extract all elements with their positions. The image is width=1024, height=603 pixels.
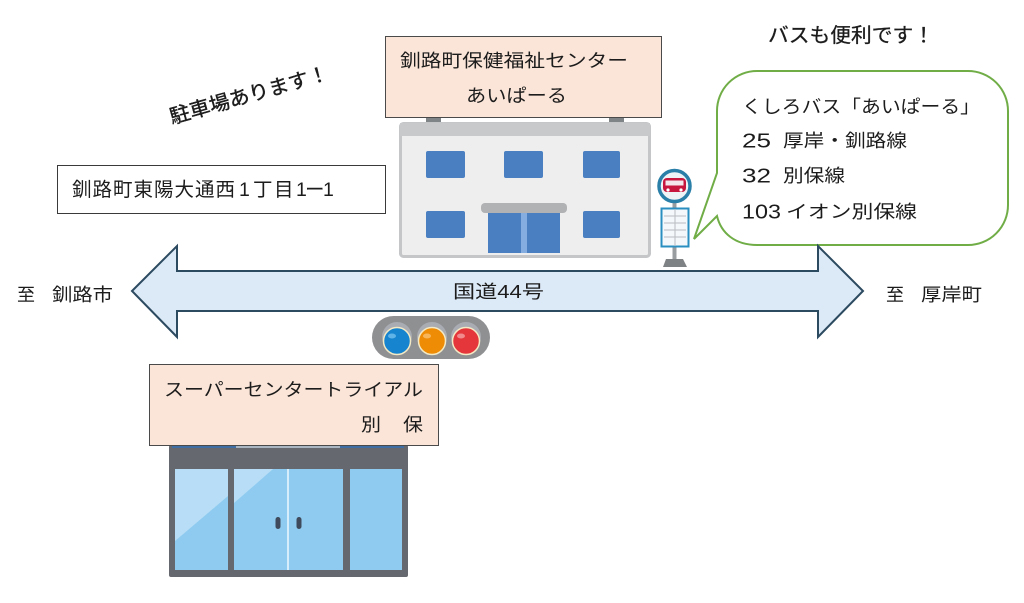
callout: bus routes: 25 <box>742 130 771 152</box>
icon: supermarket storefront <box>169 445 408 577</box>
sign: supermarket <box>150 364 438 446</box>
label: to Kushiro city: 至 <box>17 285 35 305</box>
callout: bus routes: 厚岸・釧路線 <box>783 131 907 151</box>
sign: health welfare center: あいぱーる <box>466 86 567 106</box>
address box: 釧路町東陽大通西1丁目1ー1 <box>72 179 334 201</box>
callout: bus routes: 103 <box>742 202 781 224</box>
sign: supermarket: 別 <box>361 415 381 435</box>
text: parking available: 駐車場あります！ <box>167 62 331 129</box>
text: bus is convenient: バスも便利です！ <box>768 24 934 47</box>
sign: health welfare center: 釧路町保健福祉センター <box>400 51 628 71</box>
label: to Akkeshi town <box>886 285 982 305</box>
callout: bus routes: 別保線 <box>783 166 845 186</box>
icon: traffic light <box>372 316 490 359</box>
callout: bus routes: くしろバス「あいぱーる」 <box>742 97 980 117</box>
icon: bus stop <box>659 170 690 267</box>
sign: supermarket: 保 <box>403 415 423 435</box>
label: to Kushiro city: 釧路市 <box>52 285 113 305</box>
callout: bus routes: イオン別保線 <box>786 202 917 222</box>
arrow: national route 44: 国道44号 <box>453 282 544 302</box>
icon: health welfare center building <box>400 116 650 256</box>
address box <box>58 166 386 214</box>
label: to Kushiro city <box>17 285 113 305</box>
callout: bus routes <box>694 71 1008 245</box>
sign: supermarket: スーパーセンタートライアル <box>164 380 423 400</box>
label: to Akkeshi town: 至 <box>886 285 904 305</box>
callout: bus routes: 32 <box>742 166 771 188</box>
arrow: national route 44 <box>132 246 863 337</box>
label: to Akkeshi town: 厚岸町 <box>921 285 982 305</box>
sign: health welfare center <box>386 36 662 118</box>
